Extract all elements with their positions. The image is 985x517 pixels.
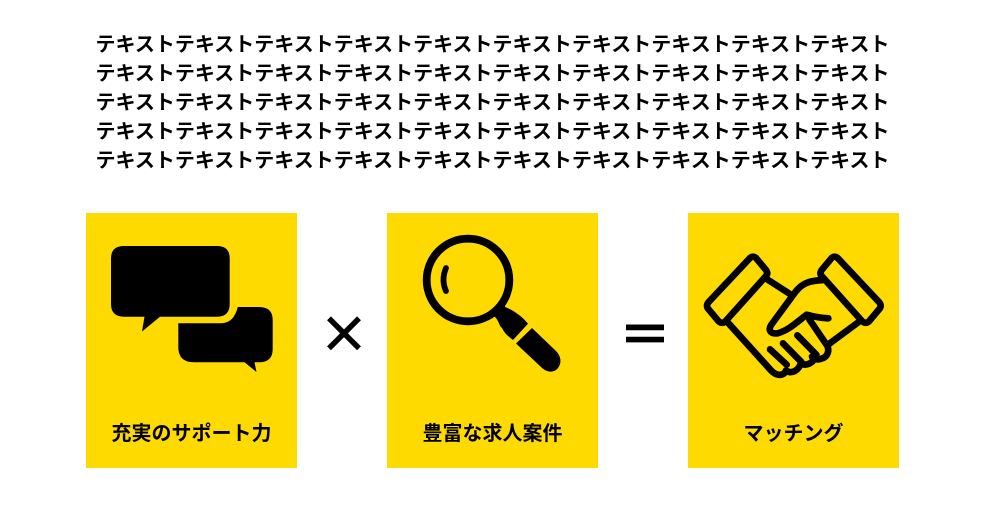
icon: speech bubbles xyxy=(111,246,273,372)
label: job listings: 豊富な求人案件 xyxy=(422,423,562,445)
text block: intro paragraph: テキストテキストテキストテキストテキストテキストテキストテキストテキストテキスト xyxy=(96,34,890,56)
text block: intro paragraph: テキストテキストテキストテキストテキストテキストテキストテキストテキストテキスト xyxy=(96,121,890,143)
panel: matching xyxy=(688,213,899,468)
icon: magnifying glass xyxy=(422,234,560,372)
label: support: 充実のサポート力 xyxy=(112,423,272,445)
text block: intro paragraph xyxy=(96,34,890,172)
text block: intro paragraph: テキストテキストテキストテキストテキストテキストテキストテキストテキストテキスト xyxy=(96,92,890,114)
panel: support xyxy=(86,213,297,468)
icon: handshake xyxy=(704,253,884,378)
text block: intro paragraph: テキストテキストテキストテキストテキストテキストテキストテキストテキストテキスト xyxy=(96,63,890,85)
label: matching: マッチング xyxy=(744,423,844,445)
panel: job listings xyxy=(387,213,598,468)
text block: intro paragraph: テキストテキストテキストテキストテキストテキストテキストテキストテキストテキスト xyxy=(96,150,890,172)
